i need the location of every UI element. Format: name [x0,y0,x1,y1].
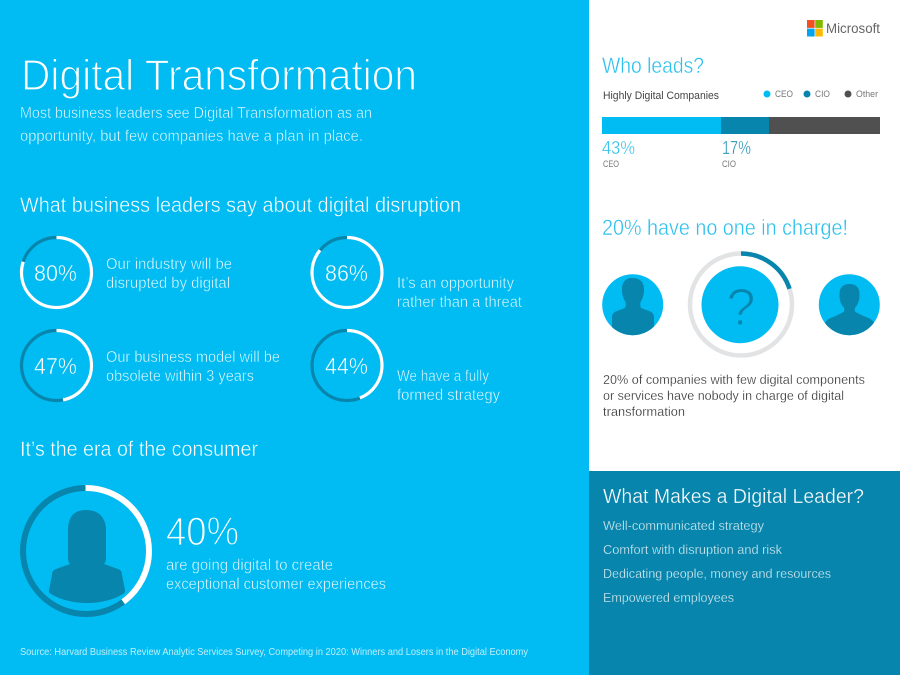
intro text: opportunity, but few companies have a plan in place. [20,128,363,145]
logo: Microsoft: Microsoft [826,21,880,36]
bar label: CIO [722,138,751,170]
legend: CEO [775,89,793,100]
stat: 44 percent: 44% [325,353,368,379]
stat: 86 percent: It’s an opportunity [397,275,514,292]
stat: 44 percent [312,330,500,404]
legend [764,89,878,100]
stat: 47 percent: Our business model will be [106,349,280,366]
list of leader traits [603,518,831,605]
stat: 80 percent: 80% [34,260,77,286]
legend: CIO [815,89,830,100]
text: no one in charge explanation: transformation [603,404,685,419]
stat: 86 percent: 86% [325,260,368,286]
heading: digital leader: What Makes a Digital Leader? [603,486,864,508]
bar label: CIO: CIO [722,159,736,170]
stat: 47 percent: 47% [34,353,77,379]
intro text [20,105,372,145]
icon: woman avatar [602,274,663,337]
panel: what makes a digital leader [589,471,900,675]
stat: 47 percent: obsolete within 3 years [106,368,254,385]
bar chart [602,117,880,134]
icon: question mark with ring [690,254,792,356]
stat: 80 percent: Our industry will be [106,256,232,273]
heading: no one in charge: 20% have no one in charge! [602,215,848,240]
intro text: Most business leaders see Digital Transformation as an [20,105,372,122]
source note: Source: Harvard Business Review Analytic Services Survey, Competing in 2020: Winners and Losers in the Digital Economy [20,646,529,658]
text: no one in charge explanation [603,372,865,419]
title: Digital Transformation [21,51,417,100]
stat: 44 percent: formed strategy [397,387,500,404]
stat text: 40 percent: are going digital to create [166,557,333,574]
chart subtitle: Highly Digital Companies [603,90,719,102]
bar label: CEO: 43% [602,138,635,158]
icon: question mark with ring: ? [727,279,755,337]
bar label: CIO: 17% [722,138,751,158]
panel: main cyan background [0,0,589,675]
logo: Microsoft [807,20,880,36]
bar label: CEO: CEO [603,159,619,170]
icon: woman silhouette [49,510,125,603]
stat: 86 percent: rather than a threat [397,294,523,311]
panel: white sidebar [589,0,900,471]
stat: 40 percent consumer ring [23,488,149,614]
stat: 47 percent [22,330,280,400]
stat: 44 percent: We have a fully [397,368,489,385]
list of leader traits: Dedicating people, money and resources [603,566,831,581]
stat: 80 percent [22,238,232,308]
heading: era of the consumer: It’s the era of the consumer [20,438,258,461]
stat: 80 percent: disrupted by digital [106,275,230,292]
stat text: 40 percent: exceptional customer experiences [166,576,386,593]
list of leader traits: Well-communicated strategy [603,518,764,533]
heading: who leads: Who leads? [602,53,704,78]
stat text: 40 percent: 40% [166,510,239,554]
list of leader traits: Comfort with disruption and risk [603,542,782,557]
stat text: 40 percent [166,510,386,593]
bar label: CEO [602,138,635,170]
heading: digital disruption: What business leaders say about digital disruption [20,194,461,217]
text: no one in charge explanation: or services have nobody in charge of digital [603,388,844,403]
legend: Other [856,89,878,100]
list of leader traits: Empowered employees [603,590,734,605]
stat: 86 percent [312,238,523,311]
icon: man avatar [818,274,880,338]
text: no one in charge explanation: 20% of companies with few digital components [603,372,865,387]
